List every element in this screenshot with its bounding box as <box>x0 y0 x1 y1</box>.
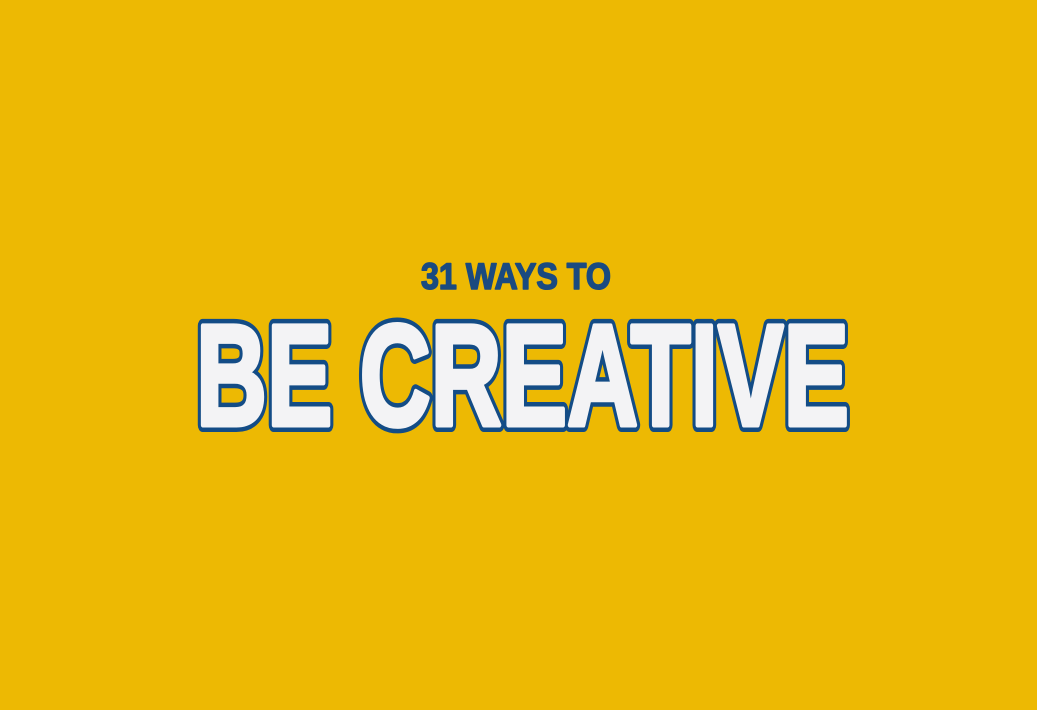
subtitle: 31 ways to: 31 WAYS TO <box>421 256 611 297</box>
